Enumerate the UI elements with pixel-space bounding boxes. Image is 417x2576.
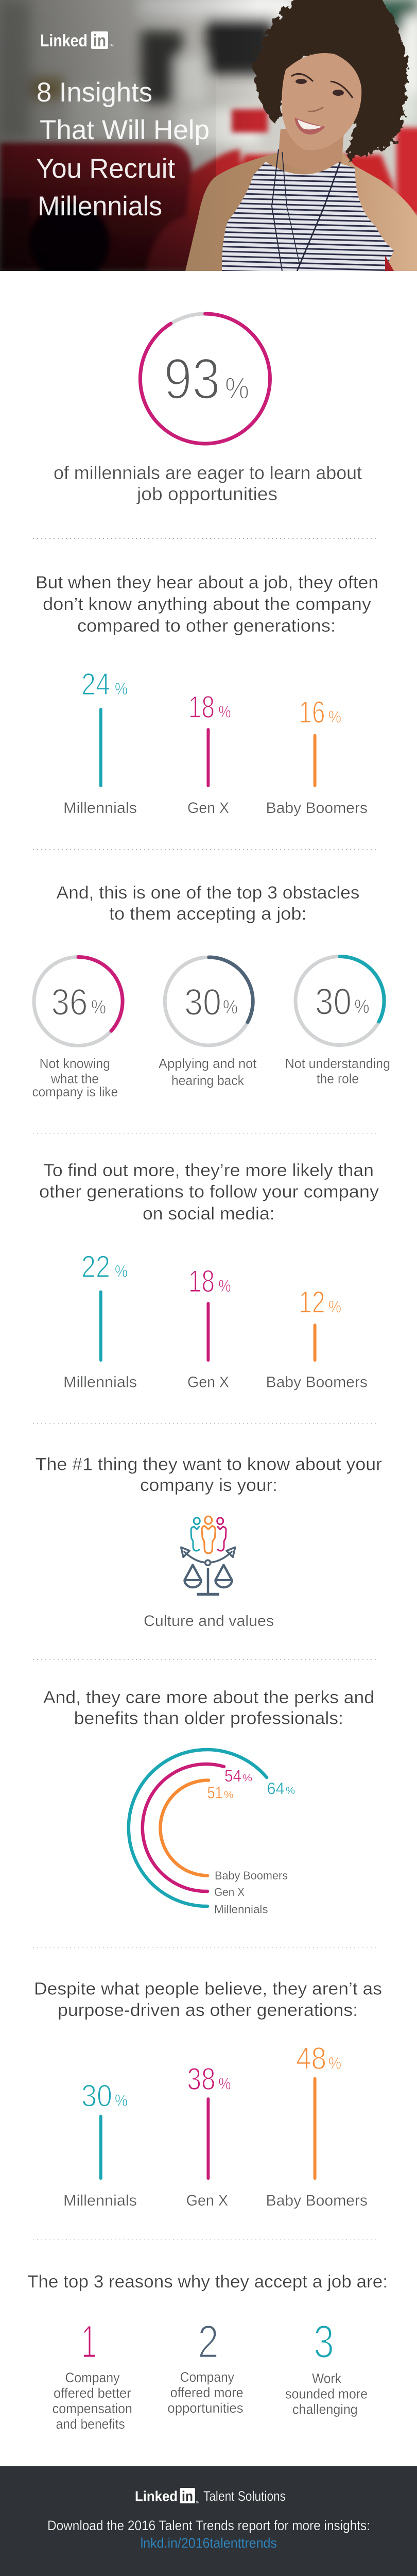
ring: 36% not knowing the company: Not knowing: [39, 1056, 110, 1071]
caption: Culture and values: [144, 1613, 274, 1630]
armpit gap: [385, 256, 394, 271]
ring: 30% not understanding the role: [285, 956, 390, 1086]
hero title: 8 Insights: [37, 77, 152, 108]
background office blur: [0, 0, 417, 283]
panel: perks and benefits: [43, 1688, 374, 1916]
reason 3: challenging: [292, 2402, 358, 2417]
ring: 36% not knowing the company: what the: [50, 1071, 99, 1086]
ring: 30% applying and not hearing back: Applying and not: [159, 1056, 257, 1071]
panel: knowledge of company by generation: [36, 573, 378, 817]
reason 1: Company: [65, 2370, 120, 2385]
bar: Baby Boomers 12%: %: [328, 1297, 341, 1316]
heading: To find out more, they’re more likely than: [43, 1161, 374, 1180]
value labels: 64: [267, 1780, 284, 1798]
overlay gradient: [0, 0, 244, 271]
reason 3: 3: [314, 2316, 334, 2368]
bar: Gen X 18%: Gen X: [187, 1374, 229, 1391]
footer logo: LinkedIn Talent Solutions: Talent Solutions: [203, 2488, 286, 2504]
reason 3: Work: [312, 2371, 341, 2386]
arc legend: Millennials: [214, 1903, 268, 1916]
bar: Millennials 22%: 22: [81, 1249, 110, 1284]
ring: 30% not understanding the role: 30: [315, 981, 352, 1023]
hero banner photo: [0, 0, 417, 283]
heading: [34, 1979, 382, 2020]
reason 3: sounded more: [285, 2386, 368, 2402]
heading: But when they hear about a job, they often: [36, 573, 378, 592]
panel: top 3 reasons: [27, 2272, 388, 2432]
bar: Gen X 38%: 38: [187, 2062, 215, 2096]
woman figure: [185, 0, 417, 271]
face: [282, 53, 361, 150]
reason 1: and benefits: [56, 2416, 125, 2432]
arc legend: Baby Boomers: [215, 1869, 288, 1882]
caption: job opportunities: [136, 483, 277, 504]
heading: [57, 883, 359, 924]
striped top: [222, 162, 394, 271]
bar: Baby Boomers 16%: Baby Boomers: [266, 800, 368, 817]
necklace cords: [272, 149, 340, 271]
panel: 93 percent stat: [54, 314, 362, 504]
LinkedIn logo: in: [93, 31, 106, 50]
heading: benefits than older professionals:: [74, 1708, 343, 1728]
bar: Gen X 38%: Gen X: [186, 2192, 228, 2209]
bar: Baby Boomers 48%: Baby Boomers: [266, 2192, 368, 2209]
value labels: [207, 1767, 295, 1802]
bar: Baby Boomers 12%: [266, 1285, 368, 1391]
bar: Gen X 18%: Gen X: [187, 800, 229, 817]
ring: 30% not understanding the role: Not understanding: [285, 1056, 390, 1071]
value labels: 54: [224, 1767, 241, 1785]
bar: Millennials 24%: %: [115, 680, 128, 698]
reason 2: [167, 2316, 244, 2416]
bar: Baby Boomers 16%: [266, 695, 368, 817]
reason 1: compensation: [53, 2401, 132, 2416]
bar chart: [63, 2041, 368, 2209]
bar: Millennials 24%: Millennials: [63, 800, 137, 817]
icon: orange person: [202, 1516, 215, 1553]
bar: Gen X 18%: [187, 690, 231, 817]
bar: Millennials 22%: %: [115, 1262, 128, 1281]
ring: 30% applying and not hearing back: 30: [184, 982, 221, 1023]
panel: purpose-driven: [34, 1979, 382, 2209]
bar: Baby Boomers 16%: 16: [299, 695, 325, 730]
footer panel: [0, 2466, 417, 2576]
heading: don’t know anything about the company: [43, 595, 371, 614]
bar: Gen X 38%: %: [218, 2074, 231, 2093]
bar: Millennials 30%: %: [115, 2091, 128, 2110]
value labels: %: [286, 1786, 295, 1797]
heading: [36, 573, 378, 636]
panel: culture and values: [36, 1455, 382, 1630]
ring chart: 93 percent: [140, 314, 270, 444]
reason 1: [53, 2316, 132, 2432]
reason 1: offered better: [54, 2385, 131, 2401]
hero title: That Will Help: [40, 115, 210, 145]
ring: 30% not understanding the role: %: [354, 996, 370, 1018]
icon: people on balance scale: [181, 1516, 235, 1594]
bar: Millennials 22%: Millennials: [63, 1374, 137, 1391]
radial arc chart: [129, 1750, 267, 1906]
value 93%: %: [225, 372, 249, 405]
bar: Millennials 24%: 24: [81, 667, 110, 702]
bar: Baby Boomers 12%: Baby Boomers: [266, 1374, 368, 1391]
hero title: You Recruit: [36, 154, 175, 184]
panel: follow on social media: [39, 1161, 379, 1391]
bar: Millennials 30%: Millennials: [63, 2192, 137, 2209]
heading: on social media:: [143, 1204, 275, 1224]
bar: Gen X 18%: 18: [188, 690, 215, 724]
icon: magenta person: [217, 1518, 226, 1551]
heading: company is your:: [140, 1476, 277, 1495]
arc legend: [214, 1869, 288, 1916]
value 93%: 93: [164, 347, 220, 411]
LinkedIn logo: Linked: [40, 31, 88, 50]
bar: Baby Boomers 48%: [266, 2041, 368, 2209]
bar: Baby Boomers 48%: %: [328, 2054, 341, 2072]
bar: Millennials 30%: 30: [81, 2078, 112, 2113]
reason 2: Company: [180, 2369, 234, 2385]
arms and shoulders: [185, 149, 417, 271]
LinkedIn logo: TM: [109, 44, 114, 47]
arc legend: Gen X: [214, 1886, 245, 1899]
ring: 36% not knowing the company: company is like: [32, 1084, 118, 1099]
bar: Baby Boomers 12%: 12: [299, 1285, 325, 1319]
ring: 36% not knowing the company: %: [91, 996, 106, 1018]
ring: 30% not understanding the role: the role: [317, 1071, 359, 1086]
heading: [39, 1161, 379, 1224]
bar: Baby Boomers 48%: 48: [296, 2041, 326, 2076]
ring: 30% applying and not hearing back: [159, 957, 257, 1088]
hero title: Millennials: [38, 191, 162, 222]
neck: [278, 129, 344, 166]
panel: top 3 obstacles: [32, 883, 390, 1099]
footer logo: LinkedIn Talent Solutions: Linked: [135, 2488, 178, 2504]
reason 2: 2: [198, 2316, 219, 2368]
reason 2: offered more: [170, 2385, 244, 2400]
value labels: %: [242, 1773, 252, 1784]
hair: [253, 0, 407, 161]
bar: Gen X 18%: [187, 1264, 231, 1391]
bar: Millennials 30%: [63, 2078, 137, 2209]
bar: Gen X 18%: %: [218, 703, 231, 721]
value labels: %: [224, 1790, 234, 1801]
hero title: [36, 77, 210, 222]
caption: [54, 462, 362, 504]
heading: other generations to follow your company: [39, 1182, 379, 1201]
value labels: 51: [207, 1784, 222, 1802]
bar: Gen X 38%: [186, 2062, 231, 2209]
heading: The top 3 reasons why they accept a job are:: [27, 2272, 388, 2292]
bar: Baby Boomers 16%: %: [328, 708, 341, 726]
ring: 30% applying and not hearing back: %: [223, 996, 238, 1018]
heading: And, this is one of the top 3 obstacles: [57, 883, 359, 903]
heading: [43, 1688, 374, 1728]
footer logo: LinkedIn Talent Solutions: TM: [196, 2501, 199, 2504]
bar: Gen X 18%: 18: [188, 1264, 215, 1298]
bar: Millennials 24%: [63, 667, 137, 817]
heading: [36, 1455, 382, 1495]
bar chart: [63, 667, 368, 817]
bar chart: [63, 1249, 368, 1391]
download call to action: Download the 2016 Talent Trends report for more insights:: [47, 2518, 370, 2533]
heading: Despite what people believe, they aren’t as: [34, 1979, 382, 1999]
heading: The #1 thing they want to know about your: [36, 1455, 382, 1475]
heading: to them accepting a job:: [109, 904, 307, 924]
caption: of millennials are eager to learn about: [54, 462, 362, 483]
bar: Gen X 18%: %: [218, 1277, 231, 1295]
icon: balance scale: [181, 1547, 235, 1594]
ring: 36% not knowing the company: 36: [51, 982, 88, 1023]
heading: And, they care more about the perks and: [43, 1688, 374, 1707]
heading: purpose-driven as other generations:: [58, 2001, 358, 2020]
footer logo: LinkedIn Talent Solutions: in: [182, 2488, 193, 2504]
ring: 36% not knowing the company: [32, 957, 123, 1099]
ring: 30% applying and not hearing back: hearing back: [171, 1073, 245, 1088]
face features: [291, 74, 353, 134]
reason 2: opportunities: [167, 2400, 244, 2416]
bar: Millennials 22%: [63, 1249, 137, 1391]
icon: teal person: [191, 1518, 200, 1551]
report link: lnkd.in/2016talenttrends: [141, 2535, 277, 2551]
footer logo: LinkedIn Talent Solutions: [135, 2488, 286, 2504]
reason 3: [285, 2316, 368, 2417]
heading: compared to other generations:: [77, 616, 336, 636]
reason 1: 1: [81, 2316, 97, 2368]
